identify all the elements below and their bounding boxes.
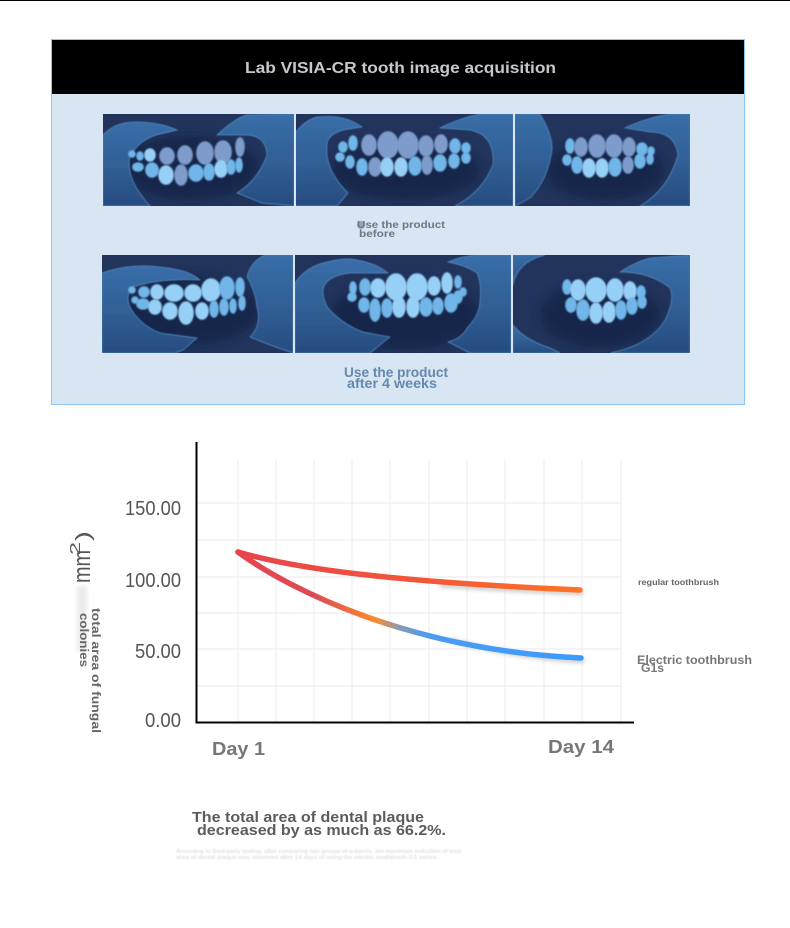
- y axis tick labels: 50.00: [135, 641, 181, 663]
- top edge line: [0, 0, 790, 1]
- photo: before, left view: [103, 114, 294, 206]
- caption: before: [357, 220, 446, 240]
- y axis title: total area of fungal: [89, 608, 101, 733]
- conclusion text: decreased by as much as 66.2%.: [197, 823, 446, 839]
- header bar: Lab VISIA-CR tooth image acquisition: [245, 60, 556, 77]
- legend: electric toothbrush G1s: Electric toothbrush: [637, 653, 752, 667]
- y axis title: ): [73, 531, 95, 541]
- caption: after 4 weeks: [344, 365, 449, 391]
- y axis title: mm: [69, 550, 96, 583]
- photo: before, front view: [296, 114, 513, 206]
- caption: before: Use the product: [357, 220, 446, 231]
- caption: after 4 weeks: Use the product: [344, 365, 449, 380]
- y axis title: colonies: [77, 613, 89, 667]
- y axis tick labels: 150.00: [125, 498, 181, 520]
- caption: before: before: [359, 229, 396, 240]
- y axis tick labels: 100.00: [125, 570, 181, 592]
- panel: lab tooth image acquisition: [52, 40, 744, 404]
- photo: after, right view: [513, 255, 690, 353]
- x axis label: day 1: Day 1: [212, 739, 265, 759]
- legend: regular toothbrush: regular toothbrush: [638, 577, 719, 587]
- legend: electric toothbrush G1s: [637, 653, 752, 675]
- x axis label: day 14: Day 14: [548, 737, 614, 757]
- y axis tick labels: [125, 498, 181, 732]
- caption: after 4 weeks: after 4 weeks: [347, 376, 437, 391]
- photo: after, front view: [295, 255, 511, 353]
- faint footnote: According to third-party testing, after comparing two groups of subjects, the maximum reduction of total: [176, 849, 461, 855]
- y axis title: 2: [67, 542, 84, 555]
- y axis title: [67, 531, 101, 733]
- axes: [196, 442, 634, 722]
- faint footnote: area of dental plaque was observed after 14 days of using the electric toothbrush G1 series.: [176, 855, 438, 861]
- faint footnote: [176, 849, 461, 861]
- legend: electric toothbrush G1s: G1s: [641, 661, 664, 675]
- curve: regular toothbrush: [238, 552, 580, 590]
- photo: before, right view: [515, 114, 690, 206]
- conclusion text: [176, 810, 461, 861]
- header bar: [52, 40, 744, 94]
- curve shadows: [440, 585, 584, 661]
- line chart: [67, 442, 752, 759]
- curve: electric toothbrush G1s: [238, 552, 581, 658]
- photo: after, left view: [102, 255, 293, 353]
- conclusion text: The total area of dental plaque: [192, 810, 424, 826]
- y axis tick labels: 0.00: [145, 710, 181, 732]
